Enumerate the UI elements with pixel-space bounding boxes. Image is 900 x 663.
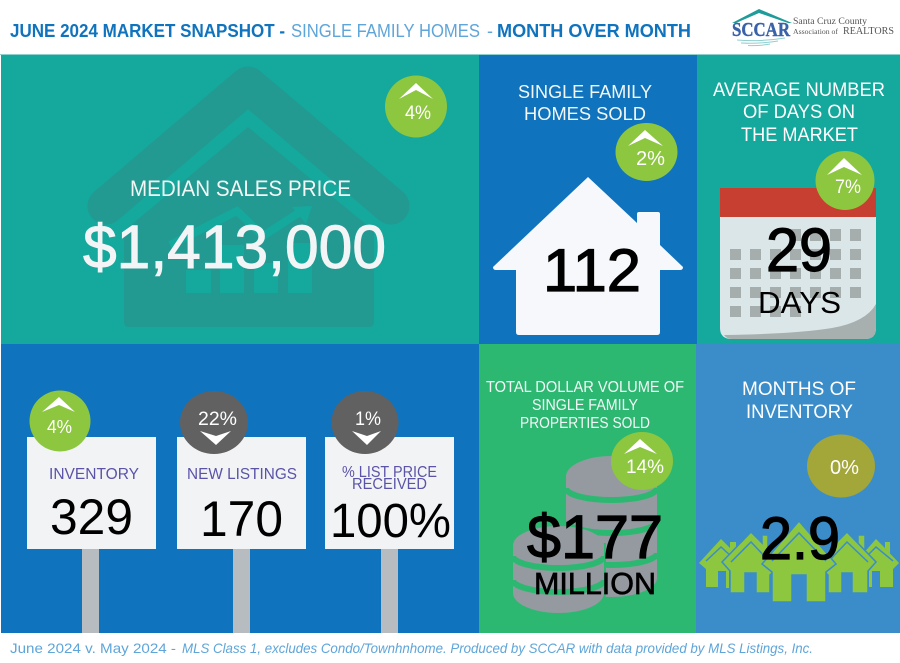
sign: new listings: NEW LISTINGS	[187, 466, 297, 483]
heading: months of inventory	[742, 378, 856, 423]
footer note: June 2024 v. May 2024 -	[10, 640, 176, 656]
panel: total dollar volume	[479, 344, 696, 633]
value: 29 days: DAYS	[758, 285, 841, 320]
value: 29 days	[758, 216, 841, 320]
value: homes sold: 112	[543, 237, 641, 304]
logo: SCCAR: REALTORS	[843, 26, 894, 37]
heading: homes sold	[518, 81, 652, 124]
header title	[10, 21, 691, 41]
logo: SCCAR	[732, 9, 894, 46]
sign: inventory: INVENTORY	[49, 466, 139, 483]
badge: flat 0%: 0%	[830, 457, 859, 479]
badge: up 2%	[616, 123, 678, 181]
heading: months of inventory: MONTHS OF	[742, 378, 856, 400]
panel: listing signs	[1, 344, 479, 633]
heading: dollar volume	[486, 379, 684, 432]
badge: down 22%	[180, 391, 248, 454]
icon: white house	[493, 177, 683, 335]
heading: days on market: AVERAGE NUMBER	[713, 79, 885, 101]
badge: flat 0%	[807, 434, 875, 498]
icon: coin stacks	[513, 456, 657, 613]
badge: up 4%	[385, 76, 447, 138]
panel: months of inventory	[696, 344, 900, 633]
badge: up 4%: 4%	[405, 103, 431, 124]
header title: SINGLE FAMILY HOMES	[291, 21, 480, 41]
sign: new listings	[177, 391, 306, 633]
badge: up 7%	[816, 151, 874, 210]
icon: watermark house	[106, 85, 391, 327]
badge: down 1%	[332, 391, 398, 454]
badge: up 7%: 7%	[835, 177, 861, 198]
sign: new listings: 170	[200, 491, 283, 547]
value: 2.9: 2.9	[760, 505, 840, 572]
value: 29 days: 29	[766, 216, 832, 284]
heading: dollar volume: PROPERTIES SOLD	[520, 415, 650, 432]
badge: up 14%: 14%	[626, 457, 664, 478]
badge: down 22%: 22%	[198, 409, 237, 430]
logo: SCCAR: Santa Cruz County	[793, 16, 868, 26]
sign: inventory	[27, 390, 156, 633]
logo: SCCAR: Association of	[793, 27, 839, 36]
logo: SCCAR: SCCAR	[732, 19, 790, 41]
heading: days on market: THE MARKET	[741, 124, 858, 146]
footer note: MLS Class 1, excludes Condo/Townhnhome. Produced by SCCAR with data provided by MLS Listings, Inc.	[182, 640, 813, 656]
panel: median sales price	[1, 55, 479, 344]
heading: months of inventory: INVENTORY	[746, 401, 853, 423]
icon: neighborhood houses	[699, 521, 899, 602]
badge: up 4%	[30, 390, 90, 452]
value: median sales price: $1,413,000	[83, 213, 386, 281]
sign: list price received: % LIST PRICE	[342, 464, 437, 481]
icon: calendar	[720, 188, 876, 339]
badge: up 2%: 2%	[636, 148, 665, 170]
value: $177 million: $177	[527, 503, 663, 571]
sign: inventory: 329	[50, 489, 133, 545]
header title: MONTH OVER MONTH	[497, 21, 691, 41]
heading: median sales price: MEDIAN SALES PRICE	[130, 176, 351, 201]
heading: homes sold: HOMES SOLD	[524, 103, 646, 124]
badge: up 14%	[611, 432, 673, 490]
heading: dollar volume: SINGLE FAMILY	[532, 397, 638, 414]
heading: dollar volume: TOTAL DOLLAR VOLUME OF	[486, 379, 684, 396]
sign: list price received: RECEIVED	[352, 476, 427, 493]
heading: days on market: OF DAYS ON	[743, 101, 855, 123]
header title: -	[487, 21, 493, 41]
sign: list price received	[325, 391, 454, 633]
value: $177 million	[527, 503, 663, 601]
panel: single family homes sold	[479, 55, 697, 344]
heading: days on market	[713, 79, 885, 146]
heading: homes sold: SINGLE FAMILY	[518, 81, 652, 102]
header title: JUNE 2024 MARKET SNAPSHOT -	[10, 21, 285, 41]
badge: up 4%: 4%	[47, 417, 72, 437]
panel: average days on market	[697, 55, 900, 344]
sign: list price received: 100%	[330, 495, 451, 548]
badge: down 1%: 1%	[355, 409, 381, 430]
value: $177 million: MILLION	[534, 566, 656, 601]
